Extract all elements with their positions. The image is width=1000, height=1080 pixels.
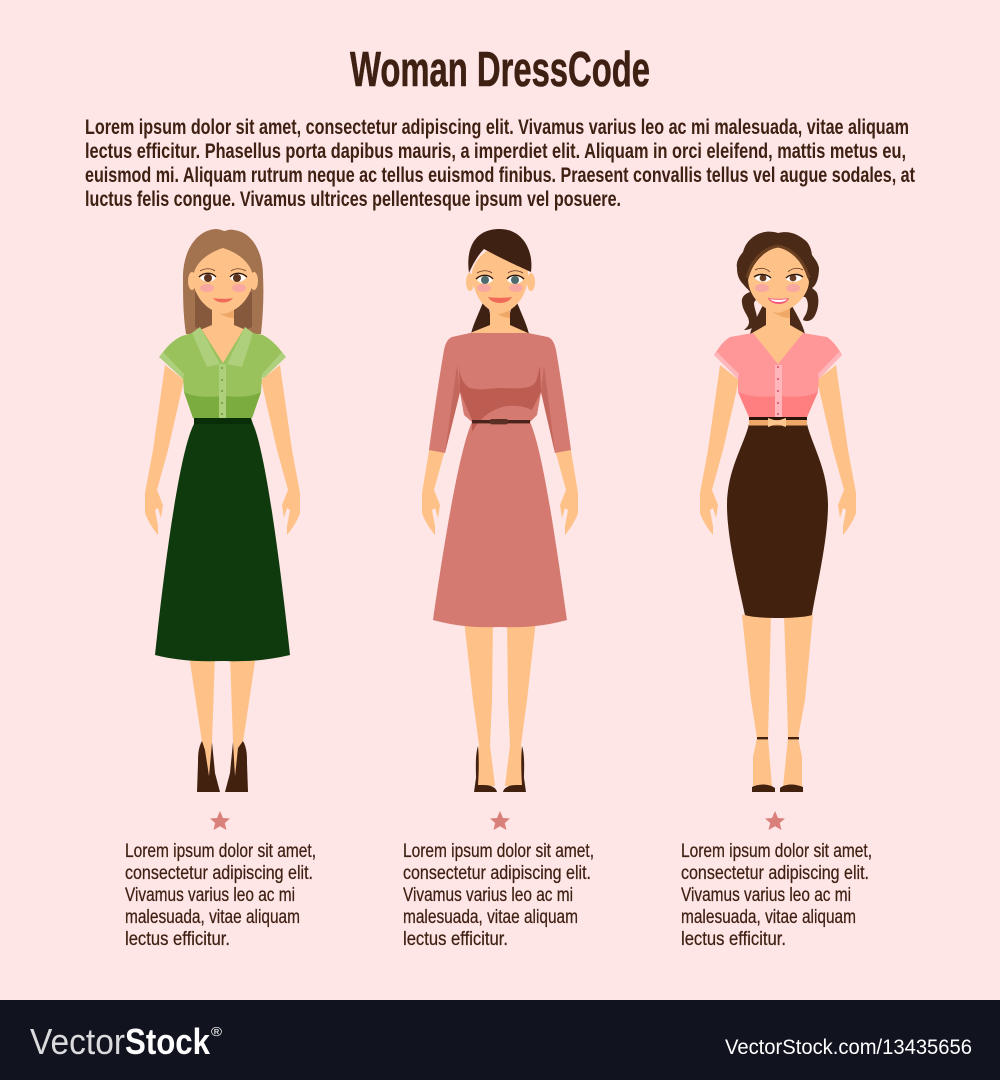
footer bar — [0, 1000, 1000, 1080]
caption 2: Lorem ipsum dolor sit amet, — [403, 841, 594, 862]
figure: woman in pink blouse and brown pencil skirt — [700, 232, 856, 792]
shoes — [197, 741, 220, 792]
icon: star 2 — [490, 811, 510, 830]
curly hair with side curls — [737, 232, 819, 330]
legs — [189, 655, 215, 776]
footer logo — [30, 1021, 222, 1062]
intro text block — [85, 116, 915, 211]
footer image id: VectorStock.com/13435656 — [725, 1036, 972, 1059]
intro text block: luctus felis congue. Vivamus ultrices pellentesque ipsum vel posuere. — [85, 188, 621, 211]
arms — [422, 445, 578, 535]
pencil skirt — [727, 424, 828, 618]
figure: woman in green blouse and dark green skirt — [145, 229, 300, 792]
title: Woman DressCode — [350, 43, 650, 97]
caption 1 — [125, 841, 316, 950]
caption 3: Vivamus varius leo ac mi — [681, 885, 851, 906]
caption 1: Vivamus varius leo ac mi — [125, 885, 295, 906]
footer logo: ® — [211, 1024, 222, 1039]
caption 2: malesuada, vitae aliquam — [403, 907, 578, 928]
arms — [700, 365, 856, 535]
caption 1: consectetur adipiscing elit. — [125, 863, 313, 884]
caption 1: Lorem ipsum dolor sit amet, — [125, 841, 316, 862]
caption 2: lectus efficitur. — [403, 929, 508, 950]
belt with bow — [749, 417, 807, 427]
caption 1: malesuada, vitae aliquam — [125, 907, 300, 928]
face details — [476, 271, 524, 303]
skirt — [155, 418, 290, 661]
legs — [464, 620, 495, 786]
icon: star 3 — [765, 811, 785, 830]
face details — [754, 268, 803, 304]
hairline highlight — [747, 246, 809, 278]
caption 3: consectetur adipiscing elit. — [681, 863, 869, 884]
caption 2: Vivamus varius leo ac mi — [403, 885, 573, 906]
hair back — [183, 229, 263, 334]
ponytail hair — [471, 300, 529, 334]
dress — [429, 333, 571, 627]
shoes — [752, 784, 775, 792]
footer logo: Stock — [125, 1021, 211, 1062]
neck and face — [752, 300, 804, 364]
arms — [145, 365, 300, 535]
bodice shading — [459, 366, 541, 432]
caption 3: lectus efficitur. — [681, 929, 786, 950]
footer logo: Vector — [30, 1021, 125, 1062]
caption 1: lectus efficitur. — [125, 929, 230, 950]
icon: star 1 — [210, 811, 230, 830]
legs — [742, 615, 772, 787]
shoes — [474, 746, 497, 792]
blouse — [714, 333, 842, 417]
ankle straps — [757, 737, 768, 739]
caption 2 — [403, 841, 594, 950]
caption 3 — [681, 841, 872, 950]
hair back locks — [750, 305, 805, 334]
face details — [199, 269, 247, 302]
belt — [472, 419, 530, 424]
caption 3: malesuada, vitae aliquam — [681, 907, 856, 928]
neck and face — [470, 300, 528, 337]
neck and face — [200, 300, 246, 364]
figure: woman in rose dress — [422, 229, 578, 792]
hair top — [468, 229, 531, 273]
blouse — [160, 327, 285, 418]
caption 3: Lorem ipsum dolor sit amet, — [681, 841, 872, 862]
caption 2: consectetur adipiscing elit. — [403, 863, 591, 884]
